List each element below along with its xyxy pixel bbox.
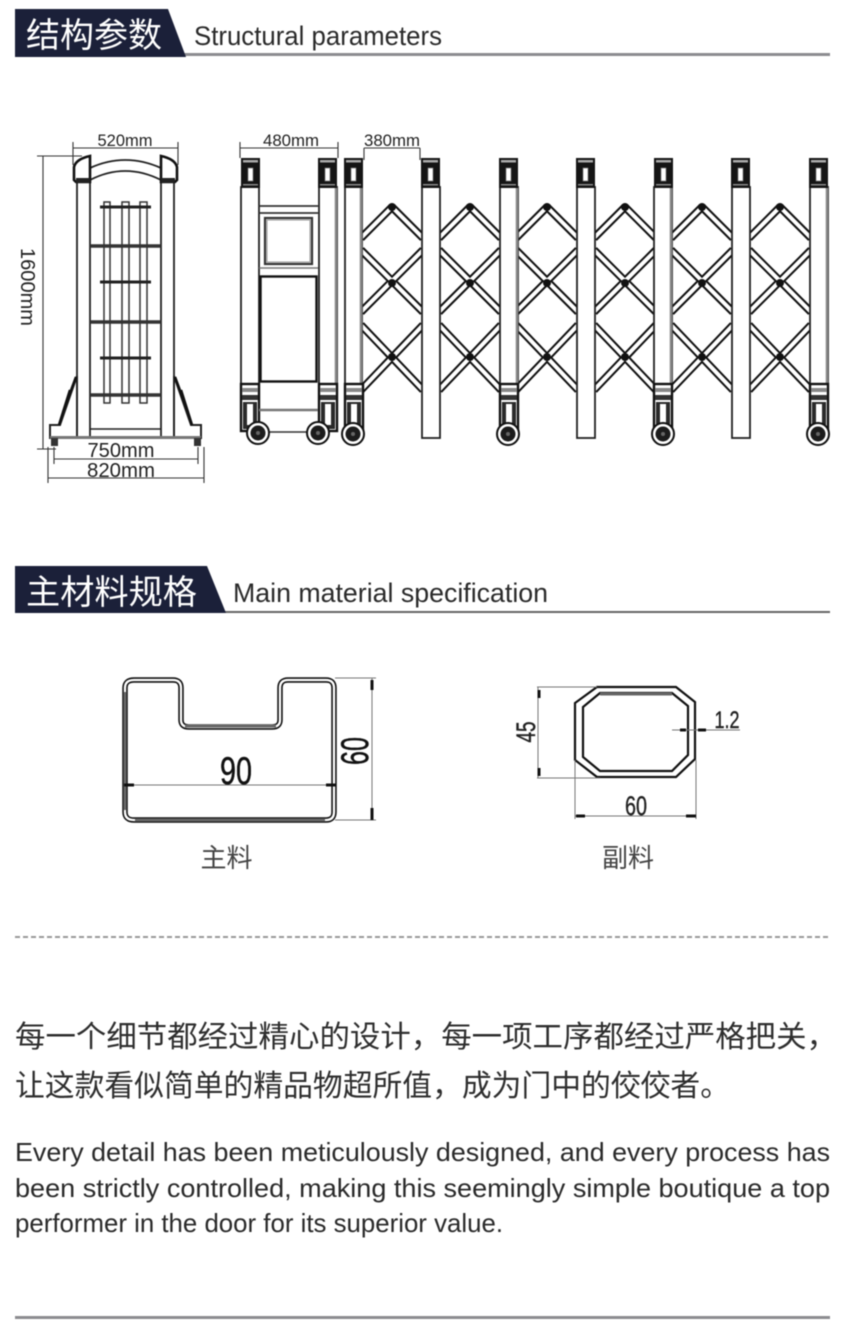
wheels [247, 422, 829, 445]
side arch [90, 160, 161, 180]
label 750mm: 750mm [88, 440, 154, 462]
main profile outline [125, 680, 334, 820]
chinese description: 每一个细节都经过精心的设计，每一项工序都经过严格把关， [15, 1012, 837, 1056]
side cap left [74, 156, 90, 182]
chinese description [15, 1012, 837, 1105]
header title english: Main material specification [233, 578, 548, 608]
lattice sections [361, 203, 811, 390]
caption secondary material: 副料 [602, 838, 654, 875]
label 380mm: 380mm [364, 131, 420, 150]
post heads [241, 158, 828, 188]
dimension 90: 90 [220, 750, 252, 793]
header underline [180, 53, 830, 56]
label 480mm: 480mm [263, 131, 319, 150]
english description: been strictly controlled, making this seemingly simple boutique a top [15, 1173, 830, 1203]
side braces [50, 376, 201, 438]
post feet [241, 384, 828, 431]
header underline [210, 611, 830, 613]
front view drawing [240, 131, 829, 445]
side cap right base [161, 178, 175, 183]
dimension 1.2: 1.2 [714, 707, 740, 734]
header tab [15, 9, 186, 57]
side posts [77, 180, 174, 438]
secondary profile outline [575, 687, 695, 777]
header tab [15, 566, 226, 613]
side inner vertical bars [104, 202, 147, 403]
header title chinese: 主材料规格 [26, 565, 197, 614]
label 820mm: 820mm [87, 460, 155, 482]
dimension 45 [511, 687, 600, 778]
dimension 1.2 [672, 707, 740, 734]
control box [259, 206, 318, 432]
dimension 60: 60 [334, 737, 377, 765]
dimension 60: 60 [625, 791, 647, 821]
dimension 45: 45 [511, 722, 541, 742]
side view drawing [16, 131, 204, 483]
gate posts [241, 187, 828, 438]
label 520mm: 520mm [98, 131, 152, 150]
header: main material specification [15, 565, 830, 614]
dimensions front view [240, 142, 420, 160]
caption main material: 主料 [200, 838, 253, 875]
secondary profile drawing [511, 687, 740, 875]
side cap left base [76, 178, 90, 183]
side horizontal rails [90, 207, 161, 429]
dimension 60 [334, 678, 377, 820]
chinese description: 让这款看似简单的精品物超所值，成为门中的佼佼者。 [15, 1061, 730, 1105]
header title english: Structural parameters [194, 21, 442, 51]
side cap right [161, 156, 177, 182]
english description [15, 1137, 830, 1238]
header title chinese: 结构参数 [26, 8, 162, 57]
english description: Every detail has been meticulously designed, and every process has [15, 1137, 830, 1167]
post gray shading [336, 187, 827, 387]
dimension 60 [575, 760, 696, 821]
side base [50, 436, 201, 439]
header: structural parameters [15, 8, 830, 57]
english description: performer in the door for its superior value. [15, 1208, 503, 1238]
label 1600mm: 1600mm [16, 248, 38, 326]
dimensions side view [37, 142, 204, 483]
side feet [51, 438, 201, 446]
main profile drawing [124, 678, 377, 875]
